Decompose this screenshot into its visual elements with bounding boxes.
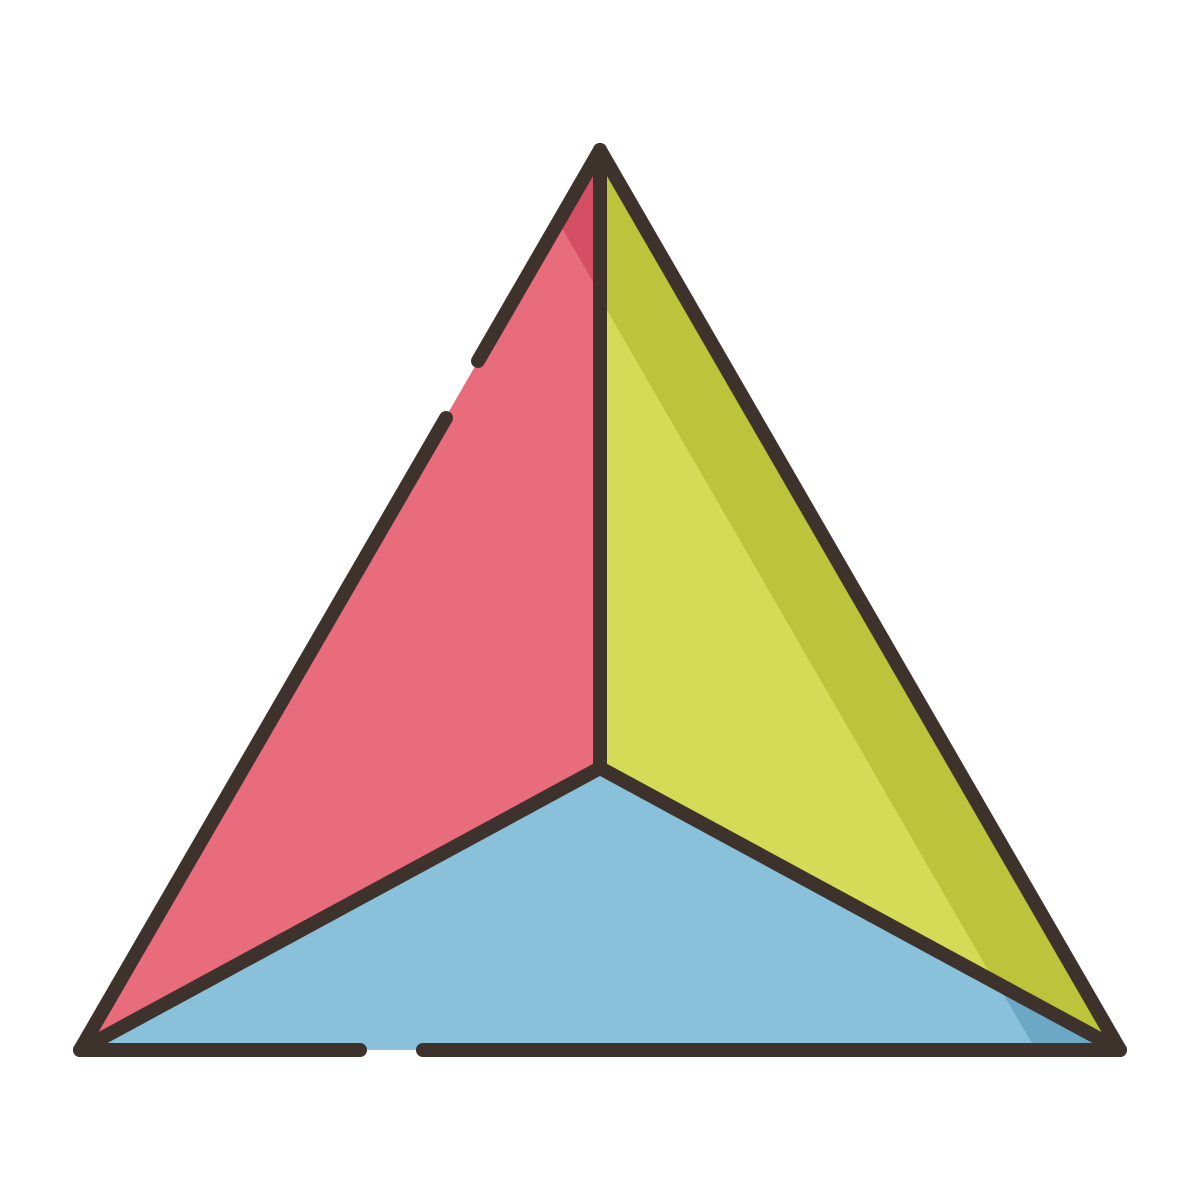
face: blue bottom <box>80 768 1120 1050</box>
outline strokes <box>80 150 1120 1050</box>
face: red left <box>80 150 600 1050</box>
edge: bottom left <box>80 1043 360 1057</box>
edge: left upper <box>478 150 600 361</box>
edge: right <box>600 150 1120 1050</box>
edge: center vertical <box>593 150 607 768</box>
edge: bottom right <box>423 1043 1120 1057</box>
shade: dark red top <box>555 150 600 294</box>
edge: left lower <box>80 418 446 1050</box>
edge: inner left <box>80 768 600 1050</box>
shade: olive right <box>600 150 1120 1050</box>
face: yellow-green right <box>600 150 1120 1050</box>
edge: inner right <box>600 768 1120 1050</box>
shade: dark blue corner <box>1002 992 1120 1050</box>
